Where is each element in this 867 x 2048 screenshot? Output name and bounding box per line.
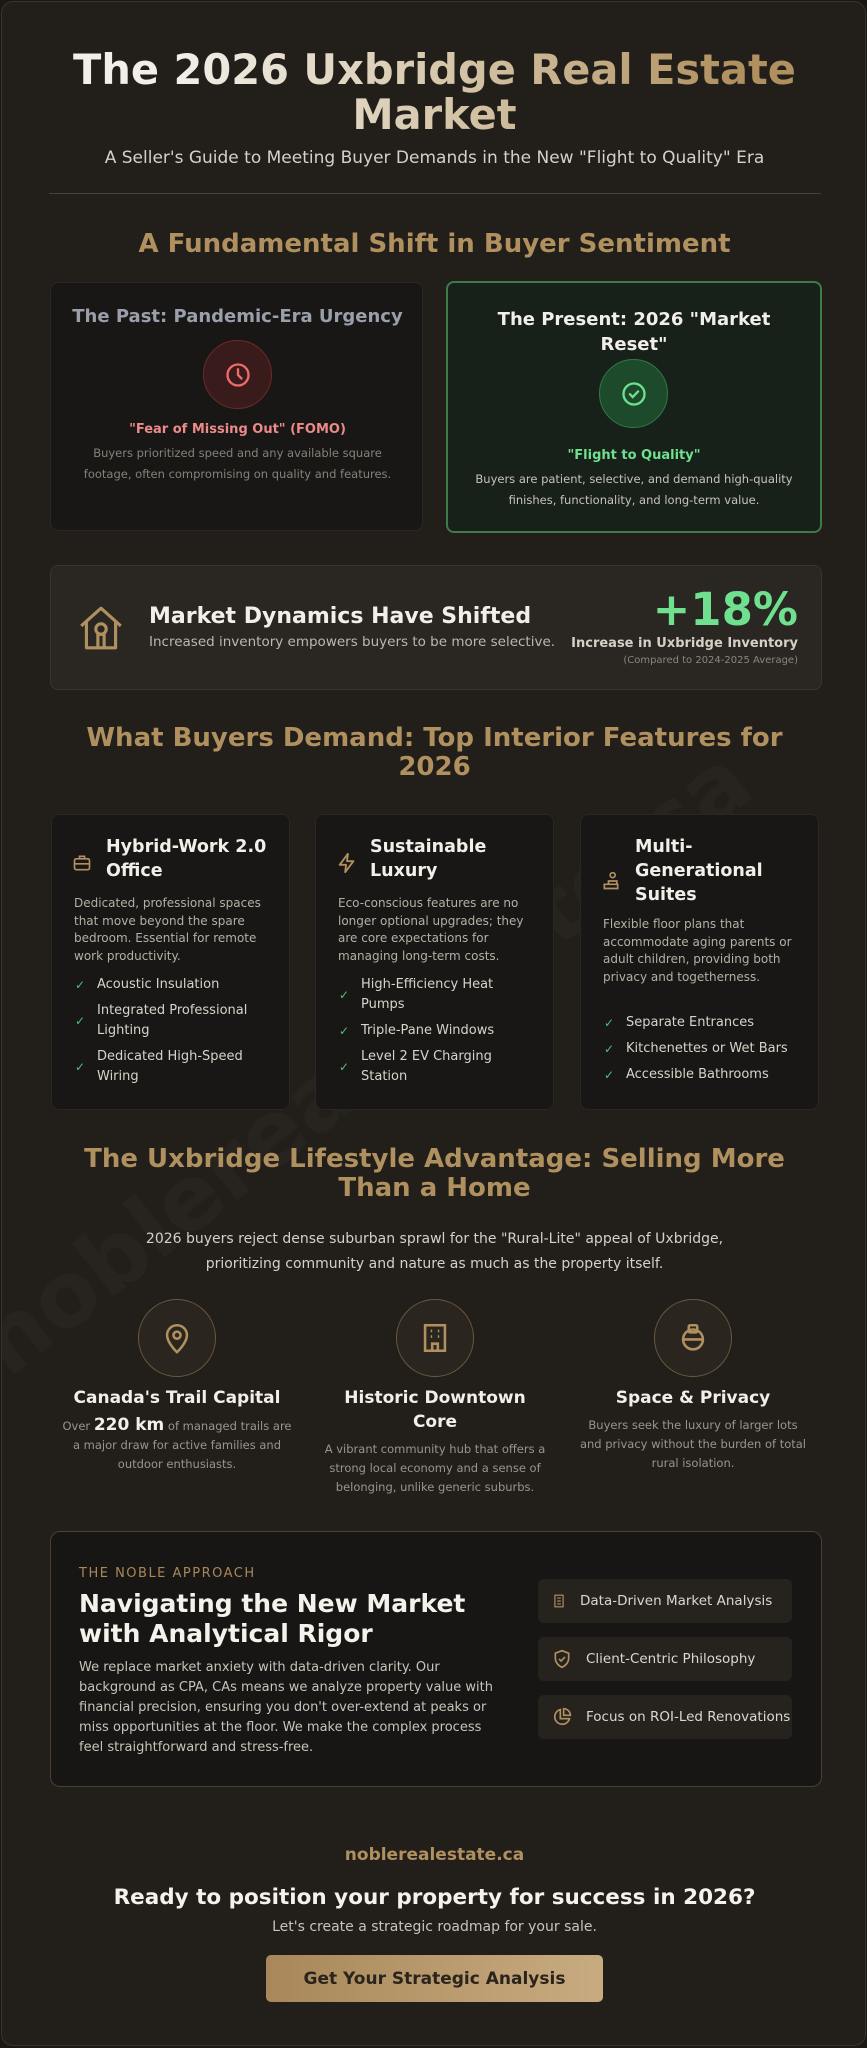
title: Market: [352, 90, 517, 139]
card: multi-generational: Generational: [635, 861, 763, 881]
present title: Reset": [600, 334, 667, 355]
lifestyle intro: 2026 buyers reject dense suburban sprawl for the "Rural-Lite" appeal of Uxbridge, prioritizing community and nature as much as the property itself.: [146, 1231, 723, 1272]
approach heading: [79, 1589, 465, 1648]
card: hybrid work: Dedicated High-Speed Wiring: [97, 1049, 243, 1084]
card: multi-generational: Multi-: [635, 837, 692, 857]
present title: [498, 309, 770, 355]
heading: buyer demands: 2026: [398, 752, 471, 782]
lifestyle: downtown: Historic Downtown: [344, 1388, 526, 1408]
past title: The Past: Pandemic-Era Urgency: [72, 306, 403, 327]
card: multi-generational: Separate Entrances: [626, 1015, 754, 1030]
icon: briefcase: [74, 856, 90, 870]
pill: client-centric: Client-Centric Philosophy: [586, 1651, 755, 1667]
heading: lifestyle: [84, 1144, 785, 1203]
eyebrow: THE NOBLE APPROACH: [79, 1566, 256, 1581]
lifestyle: downtown: Core: [413, 1412, 457, 1432]
title: The 2026 Uxbridge Real Estate: [73, 45, 796, 94]
lifestyle: trail capital: Canada's Trail Capital: [74, 1388, 280, 1408]
card: sustainable luxury: Level 2 EV Charging Station: [361, 1049, 492, 1084]
approach text: We replace market anxiety with data-driven clarity. Our background as CPA, CAs means we analyze property value with financial precision, ensuring you don't over-extend at peaks or miss opportunities at the floor. We make the complex process feel straightforward and stress-free.: [79, 1660, 493, 1755]
lifestyle: trail capital: [62, 1299, 292, 1471]
card: hybrid work: Dedicated, professional spaces that move beyond the spare bedroom. Essential for remote work productivity.: [74, 896, 261, 962]
panel: the past: [50, 282, 423, 531]
card: hybrid work: [51, 814, 290, 1110]
card: sustainable luxury: Sustainable: [370, 837, 486, 857]
card: sustainable luxury: Eco-conscious features are no longer optional upgrades; they are core expectations for managing long-term costs.: [338, 896, 524, 962]
FOMO label: "Fear of Missing Out" (FOMO): [129, 422, 346, 437]
stat label: Increase in Uxbridge Inventory: [571, 636, 798, 651]
dynamics title: Market Dynamics Have Shifted: [149, 604, 531, 629]
icon: clock: [203, 340, 272, 409]
lifestyle: space privacy: Buyers seek the luxury of larger lots and privacy without the burden of total rural isolation.: [580, 1418, 806, 1470]
card: hybrid work: Hybrid-Work 2.0: [106, 837, 266, 857]
pill: ROI: Focus on ROI-Led Renovations: [586, 1709, 790, 1725]
panel: market dynamics: [50, 565, 822, 690]
card: sustainable luxury: Triple-Pane Windows: [361, 1023, 494, 1038]
card: sustainable luxury: High-Efficiency Heat Pumps: [361, 977, 493, 1012]
card: hybrid work: Acoustic Insulation: [97, 977, 219, 992]
button: Get Your Strategic Analysis: [304, 1968, 565, 1988]
heading: lifestyle: The Uxbridge Lifestyle Advantage: Selling More: [84, 1144, 785, 1174]
heading: buyer demands: [86, 723, 783, 782]
stat: +18%: +18%: [653, 583, 798, 636]
icon: check: [599, 359, 668, 428]
card: multi-generational: Accessible Bathrooms: [626, 1067, 769, 1082]
heading: lifestyle: Than a Home: [338, 1173, 531, 1203]
pill: data-driven: [538, 1579, 792, 1623]
panel: noble approach: [50, 1531, 822, 1787]
lifestyle: space privacy: [580, 1299, 806, 1470]
card: sustainable luxury: [315, 814, 554, 1110]
present description: Buyers are patient, selective, and demand high-quality finishes, functionality, and long-term value.: [475, 472, 793, 507]
approach heading: with Analytical Rigor: [79, 1619, 373, 1648]
card: multi-generational: [580, 814, 819, 1110]
icon: house: [80, 606, 122, 650]
heading: buyer demands: What Buyers Demand: Top Interior Features for: [86, 723, 783, 753]
icon: building: [396, 1299, 474, 1377]
lifestyle: trail capital: Over 220 km of managed trails are a major draw for active families and outdoor enthusiasts.: [62, 1415, 292, 1471]
card: multi-generational: Flexible floor plans that accommodate aging parents or adult children, providing both privacy and togetherness.: [603, 917, 792, 984]
card: multi-generational: Suites: [635, 885, 697, 905]
pill: ROI: [538, 1695, 792, 1739]
panel: the present: [446, 281, 822, 533]
pill: data-driven: Data-Driven Market Analysis: [580, 1593, 772, 1609]
dynamics subtitle: Increased inventory empowers buyers to be more selective.: [149, 634, 555, 650]
card: sustainable luxury: Luxury: [370, 861, 437, 881]
icon: family: [604, 872, 618, 890]
lifestyle: downtown: A vibrant community hub that offers a strong local economy and a sense of belonging, unlike generic suburbs.: [325, 1442, 545, 1494]
card: hybrid work: Integrated Professional Lighting: [97, 1003, 247, 1038]
heading: buyer sentiment: A Fundamental Shift in Buyer Sentiment: [138, 229, 731, 259]
icon: bolt: [338, 852, 354, 874]
website: noblerealestate.ca: [345, 1845, 524, 1865]
subtitle: A Seller's Guide to Meeting Buyer Demands in the New "Flight to Quality" Era: [105, 148, 764, 168]
icon: map pin: [138, 1299, 216, 1377]
button: [266, 1955, 603, 2002]
cta subtitle: Let's create a strategic roadmap for your sale.: [272, 1919, 597, 1935]
stat note: (Compared to 2024-2025 Average): [623, 655, 798, 666]
title: [2, 47, 867, 137]
card: hybrid work: Office: [106, 861, 163, 881]
flight to quality label: "Flight to Quality": [568, 448, 700, 463]
lifestyle: downtown: [324, 1299, 545, 1494]
icon: privacy: [654, 1299, 732, 1377]
pill: client-centric: [538, 1637, 792, 1681]
lifestyle: space privacy: Space & Privacy: [616, 1388, 770, 1408]
card: multi-generational: Kitchenettes or Wet Bars: [626, 1041, 788, 1056]
present title: The Present: 2026 "Market: [498, 309, 770, 330]
approach heading: Navigating the New Market: [79, 1589, 465, 1618]
cta heading: Ready to position your property for success in 2026?: [114, 1885, 755, 1910]
past description: Buyers prioritized speed and any available square footage, often compromising on quality and features.: [84, 446, 391, 481]
